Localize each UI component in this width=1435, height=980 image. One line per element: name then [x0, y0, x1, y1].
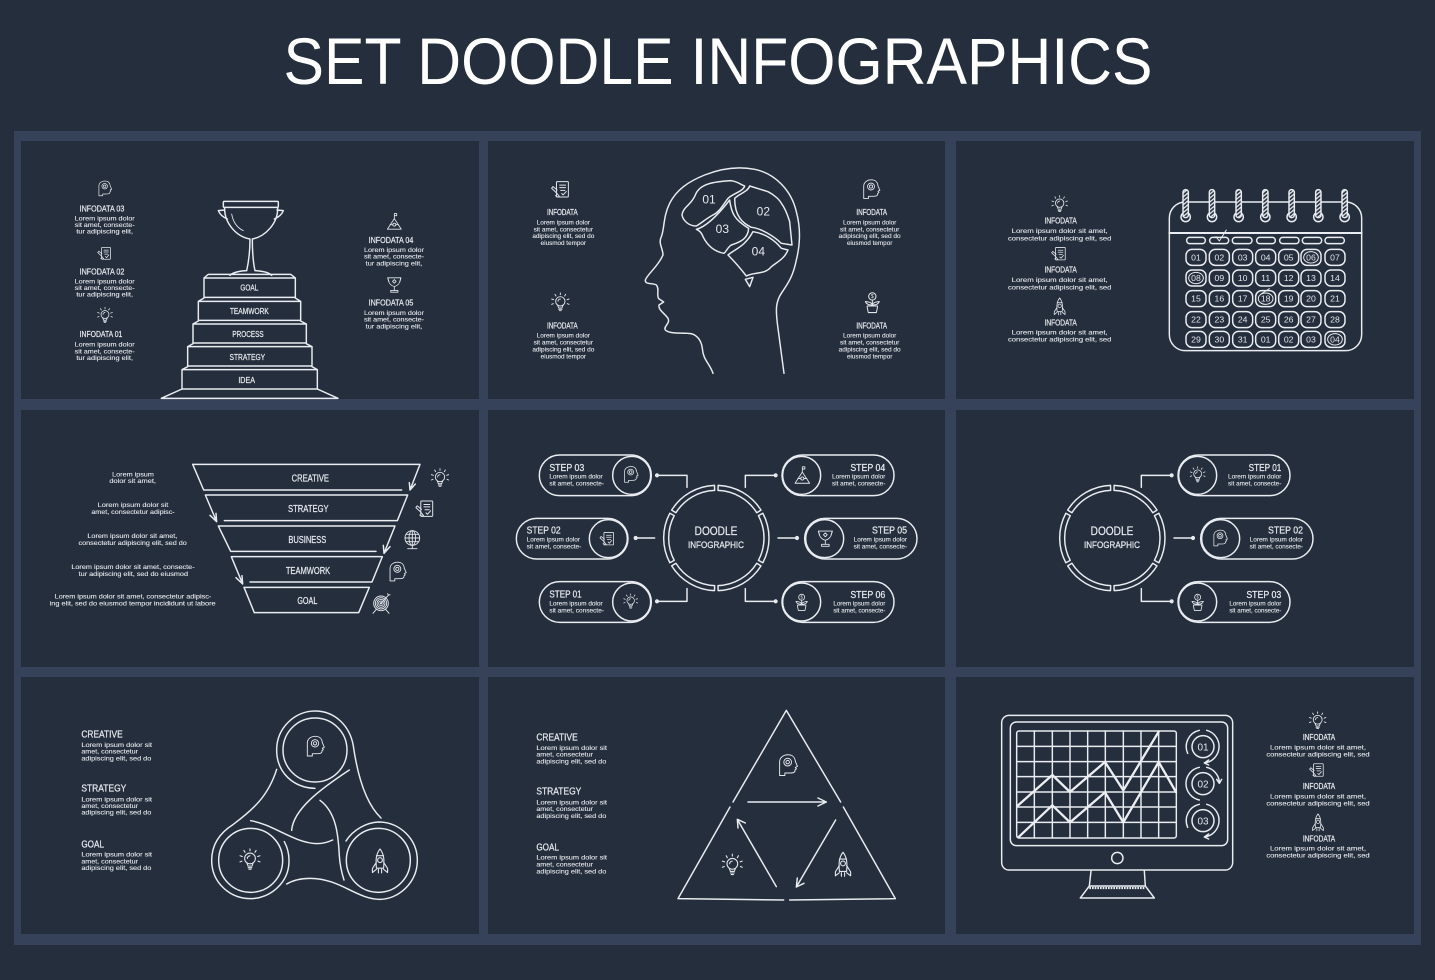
pill: step 04: Lorem ipsum dolor: [832, 474, 885, 481]
text block: infodata 05: [364, 299, 424, 330]
text block: strategy: STRATEGY: [536, 787, 582, 798]
text block: goal: adipiscing elit, sed do: [81, 865, 152, 872]
funnel left text: dolor sit amet,: [109, 478, 156, 485]
calendar date grid: 07: [1330, 252, 1340, 262]
pill: step 03: STEP 03: [549, 463, 584, 474]
text block: bottom left: [532, 321, 595, 360]
funnel labels: CREATIVE: [292, 473, 329, 484]
triangle outline: [678, 710, 895, 900]
text block: first: consectetur adipiscing elit, sed: [1008, 235, 1112, 242]
text block: top right: adipiscing elit, sed do: [839, 233, 901, 240]
panel: brain head: [488, 141, 945, 399]
funnel icon: target: [373, 594, 390, 613]
icon: trophy: [388, 278, 401, 292]
funnel icon: globe: [405, 531, 420, 549]
text block: infodata 01: Lorem ipsum dolor: [75, 341, 135, 348]
icon: document: [552, 182, 568, 197]
text block: goal: amet, consectetur: [81, 858, 138, 865]
panel: triple lobe: [21, 677, 479, 934]
text block: creative: CREATIVE: [81, 729, 123, 740]
pill: step 02: STEP 02: [527, 526, 561, 537]
text block: top left: sit amet, consectetur: [534, 226, 593, 233]
text block: bottom right: [839, 321, 901, 360]
icon: document: [1052, 247, 1065, 260]
text block: bottom left: INFODATA: [547, 321, 578, 330]
calendar date grid: 24: [1238, 315, 1248, 325]
text block: second: consectetur adipiscing elit, sed: [1266, 801, 1370, 808]
text block: strategy: adipiscing elit, sed do: [81, 810, 152, 817]
icon: pyramid: [387, 214, 401, 229]
icon: rocket: [372, 849, 388, 873]
icon: document: [1310, 764, 1323, 776]
arrow: bottom left up: [737, 819, 776, 887]
text block: infodata 05: Lorem ipsum dolor: [364, 310, 424, 317]
icon: head: [99, 181, 112, 196]
text block: infodata 02: [75, 267, 135, 299]
step circle 03: 03: [1197, 816, 1209, 827]
calendar date grid: 16: [1215, 294, 1224, 304]
funnel left text: ing elit, sed do eiusmod tempor incididunt ut labore: [50, 600, 216, 607]
funnel labels: GOAL: [297, 596, 318, 607]
panel: calendar: [956, 141, 1414, 399]
text block: creative: Lorem ipsum dolor sit: [536, 745, 607, 752]
text block: strategy: adipiscing elit, sed do: [536, 813, 607, 820]
pill: step 02: sit amet, consecte-: [1250, 543, 1303, 550]
text block: infodata 04: INFODATA 04: [369, 236, 414, 245]
pill: step 06: sit amet, consecte-: [833, 608, 885, 615]
calendar date grid: 08: [1191, 273, 1201, 283]
calendar date grid: 12: [1284, 273, 1294, 283]
funnel icon: bulb: [431, 469, 449, 486]
funnel level: creative: [193, 464, 420, 490]
text block: infodata 01: [75, 330, 135, 362]
pill: step 03: STEP 03: [1246, 590, 1281, 601]
pill: step 04: sit amet, consecte-: [832, 481, 885, 488]
pill: step 01: [1178, 455, 1290, 496]
funnel level: goal: [244, 587, 369, 613]
text block: strategy: amet, consectetur: [81, 803, 138, 810]
pill: step 01: [539, 582, 651, 622]
center label: [688, 524, 744, 550]
calendar date grid: 28: [1330, 315, 1340, 325]
text block: third: [1266, 834, 1370, 860]
text block: first: INFODATA: [1044, 217, 1077, 226]
central ring: [664, 485, 769, 591]
pill: step 02: Lorem ipsum dolor: [1250, 536, 1303, 543]
text block: goal: amet, consectetur: [536, 861, 593, 868]
text block: infodata 05: INFODATA 05: [369, 299, 414, 308]
monitor frame: [1002, 715, 1233, 870]
pill: step 01: STEP 01: [549, 590, 582, 601]
panel: six step ring: [488, 410, 945, 667]
calendar date grid: 01: [1191, 252, 1201, 262]
icon: bulb: [1052, 196, 1067, 212]
pill: step 03: Lorem ipsum dolor: [1229, 601, 1281, 608]
text block: top right: INFODATA: [856, 208, 888, 217]
text block: strategy: Lorem ipsum dolor sit: [81, 796, 152, 803]
text block: creative: [536, 732, 607, 766]
icon: bulb: [552, 293, 569, 311]
lobe numbers: 01: [702, 193, 716, 207]
calendar date grid: 27: [1306, 315, 1316, 325]
calendar date grid: 21: [1330, 294, 1340, 304]
pill: step 05: Lorem ipsum dolor: [854, 536, 907, 543]
pill: step 03: sit amet, consecte-: [1229, 608, 1281, 615]
funnel left text: amet, consectetur adipisc-: [91, 509, 175, 516]
calendar date grid: 25: [1261, 315, 1271, 325]
calendar date grid: 09: [1215, 273, 1224, 283]
funnel left text: Lorem ipsum dolor sit: [98, 502, 169, 509]
icon: rocket: [1054, 298, 1065, 315]
funnel left text: Lorem ipsum dolor sit amet, consectetur adipisc-: [55, 593, 211, 600]
pill: step 02: sit amet, consecte-: [527, 543, 581, 550]
calendar body: [1169, 202, 1362, 351]
pill: step 03: Lorem ipsum dolor: [549, 474, 603, 481]
text block: goal: [536, 842, 607, 875]
brain lobes: [682, 181, 792, 287]
calendar date grid: 06: [1306, 252, 1316, 262]
pill: step 02: [1201, 518, 1313, 559]
step circle 01: [1186, 730, 1219, 765]
icon: rocket: [1313, 814, 1323, 831]
text block: second: [1008, 266, 1112, 291]
text block: top right: eiusmod tempor: [847, 240, 892, 247]
calendar date grid: 02: [1215, 252, 1224, 262]
text block: first: INFODATA: [1303, 733, 1336, 742]
text block: top left: Lorem ipsum dolor: [537, 219, 590, 226]
step labels: STRATEGY: [229, 353, 266, 362]
text block: goal: GOAL: [536, 842, 560, 853]
panel: funnel: [21, 410, 479, 667]
text block: bottom right: eiusmod tempor: [847, 353, 892, 360]
text block: third: [1008, 318, 1112, 344]
text block: second: INFODATA: [1303, 782, 1336, 791]
step circle 03: [1186, 804, 1219, 839]
calendar date grid: 03: [1238, 252, 1248, 262]
text block: second: consectetur adipiscing elit, sed: [1008, 284, 1112, 291]
icon: rocket: [835, 852, 851, 876]
central ring: [1060, 485, 1165, 591]
text block: bottom right: sit amet, consectetur: [840, 340, 899, 347]
funnel left text: Lorem ipsum: [112, 471, 154, 478]
funnel level: teamwork: [231, 557, 382, 584]
text block: goal: Lorem ipsum dolor sit: [81, 852, 152, 859]
text block: top left: INFODATA: [547, 208, 578, 217]
text block: strategy: STRATEGY: [81, 784, 127, 795]
text block: infodata 04: [364, 236, 424, 267]
step labels: PROCESS: [232, 330, 264, 339]
calendar date grid: 14: [1330, 273, 1340, 283]
text block: second: [1266, 782, 1370, 808]
monitor stand: [1080, 871, 1154, 898]
text block: top left: eiusmod tempor: [541, 240, 586, 247]
panel: monitor chart: [956, 677, 1414, 934]
text block: infodata 03: tur adipiscing elit,: [76, 229, 133, 236]
pill: step 05: sit amet, consecte-: [854, 543, 907, 550]
text block: first: Lorem ipsum dolor sit amet,: [1270, 744, 1366, 751]
text block: third: INFODATA: [1303, 834, 1336, 843]
funnel labels: BUSINESS: [288, 535, 326, 546]
funnel left text: Lorem ipsum dolor sit amet,: [87, 533, 178, 540]
text block: infodata 01: INFODATA 01: [80, 330, 123, 339]
pill: step 02: Lorem ipsum dolor: [527, 536, 580, 543]
text block: creative: adipiscing elit, sed do: [81, 756, 152, 763]
pill: step 02: STEP 02: [1268, 526, 1303, 537]
icon: bulb: [1309, 712, 1326, 729]
pill: step 01: STEP 01: [1249, 463, 1281, 474]
text block: strategy: [536, 787, 607, 820]
center label: [1084, 524, 1140, 550]
pill: step 03: [1178, 582, 1290, 622]
funnel left text: Lorem ipsum dolor sit amet, consecte-: [71, 564, 195, 571]
pill: step 03: [539, 455, 651, 496]
funnel labels: STRATEGY: [288, 504, 329, 515]
text block: goal: adipiscing elit, sed do: [536, 868, 607, 875]
text block: third: consectetur adipiscing elit, sed: [1266, 853, 1370, 860]
text block: infodata 05: tur adipiscing elit,: [366, 323, 423, 330]
calendar rings: [1181, 190, 1349, 222]
trophy: [218, 201, 283, 275]
grid: [1017, 731, 1176, 838]
connectors: [634, 474, 798, 603]
title: SET DOODLE INFOGRAPHICS: [284, 24, 1152, 98]
lobe numbers: 04: [752, 244, 765, 258]
text block: creative: Lorem ipsum dolor sit: [81, 742, 152, 749]
text block: strategy: amet, consectetur: [536, 806, 593, 813]
step labels: [229, 283, 269, 385]
text block: second: Lorem ipsum dolor sit amet,: [1012, 277, 1108, 284]
icon: head: [864, 180, 880, 199]
text block: first: [1008, 217, 1112, 242]
text block: first: [1266, 733, 1370, 759]
calendar date grid: 19: [1284, 294, 1294, 304]
text block: goal: Lorem ipsum dolor sit: [536, 855, 607, 862]
panel: triangle: [488, 677, 945, 934]
funnel icon: document: [416, 501, 433, 516]
funnel left text: tur adipiscing elit, sed do eiusmod: [79, 571, 189, 578]
calendar date grid: 29: [1191, 334, 1201, 344]
text block: creative: CREATIVE: [536, 732, 578, 743]
calendar date grid: 11: [1261, 273, 1270, 283]
lobe numbers: [702, 193, 770, 258]
step circle 01: 01: [1197, 742, 1209, 753]
text block: infodata 02: Lorem ipsum dolor: [75, 278, 135, 285]
pill: step 06: [782, 582, 894, 622]
text block: infodata 01: sit amet, consecte-: [75, 348, 135, 355]
pill: step 04: STEP 04: [850, 463, 886, 474]
icon: document: [98, 247, 111, 259]
weekday pills: [1187, 230, 1344, 244]
icon: head: [780, 755, 797, 775]
panel: trophy steps: [21, 141, 479, 399]
lobe numbers: 03: [716, 222, 729, 236]
text block: bottom right: adipiscing elit, sed do: [839, 346, 901, 353]
calendar date grid: 18: [1261, 294, 1271, 304]
arrow: right down: [796, 820, 836, 887]
text block: goal: [81, 839, 152, 872]
text block: bottom left: eiusmod tempor: [541, 353, 586, 360]
center label: INFOGRAPHIC: [1084, 540, 1140, 550]
text block: infodata 01: tur adipiscing elit,: [76, 355, 133, 362]
text block: second: INFODATA: [1044, 266, 1077, 275]
text block: infodata 04: tur adipiscing elit,: [366, 260, 423, 267]
calendar date grid: 23: [1215, 315, 1224, 325]
funnel level: business: [218, 526, 395, 553]
text block: creative: amet, consectetur: [536, 752, 593, 759]
head outline: [645, 168, 799, 373]
text block: infodata 02: INFODATA 02: [80, 267, 125, 276]
step circle 02: 02: [1197, 779, 1209, 790]
funnel level: strategy: [205, 495, 408, 522]
text block: bottom left: sit amet, consectetur: [534, 340, 593, 347]
icon: bulb: [240, 849, 260, 869]
text block: infodata 03: Lorem ipsum dolor: [75, 215, 135, 222]
text block: infodata 02: sit amet, consecte-: [75, 285, 135, 292]
center label: DOODLE: [1091, 524, 1133, 538]
text block: goal: GOAL: [81, 839, 105, 850]
calendar date grid: 02: [1284, 334, 1294, 344]
text block: second: Lorem ipsum dolor sit amet,: [1270, 793, 1366, 800]
text block: bottom right: Lorem ipsum dolor: [843, 333, 896, 340]
text block: first: consectetur adipiscing elit, sed: [1266, 752, 1370, 759]
text block: third: INFODATA: [1044, 318, 1077, 327]
pill: step 03: sit amet, consecte-: [549, 481, 604, 488]
calendar date grid: 22: [1191, 315, 1201, 325]
text block: strategy: [81, 784, 152, 817]
pill: step 01: sit amet, consecte-: [1228, 481, 1281, 488]
text block: top right: Lorem ipsum dolor: [843, 219, 896, 226]
pill: step 05: STEP 05: [872, 526, 907, 537]
text block: bottom left: adipiscing elit, sed do: [532, 346, 595, 353]
icon: bulb: [98, 307, 112, 322]
icon: plant: [865, 293, 879, 313]
text block: infodata 02: tur adipiscing elit,: [76, 292, 133, 299]
lobe numbers: 02: [757, 204, 770, 218]
text block: creative: amet, consectetur: [81, 749, 138, 756]
text block: infodata 04: sit amet, consecte-: [364, 254, 424, 261]
text block: infodata 03: INFODATA 03: [80, 205, 125, 214]
funnel labels: [286, 473, 331, 607]
text block: infodata 03: [75, 205, 135, 236]
text block: third: Lorem ipsum dolor sit amet,: [1012, 329, 1108, 336]
pill: step 06: Lorem ipsum dolor: [833, 601, 885, 608]
calendar date grid: 20: [1306, 294, 1316, 304]
step circle 02: [1186, 767, 1222, 800]
center label: INFOGRAPHIC: [688, 540, 744, 550]
text block: infodata 04: Lorem ipsum dolor: [364, 247, 424, 254]
pill: step 01: Lorem ipsum dolor: [1228, 474, 1281, 481]
step labels: IDEA: [238, 376, 256, 385]
pill: step 02: [516, 518, 628, 559]
calendar date grid: 31: [1238, 334, 1248, 344]
text block: top right: [839, 208, 901, 247]
pill: step 04: [782, 455, 894, 496]
text block: strategy: Lorem ipsum dolor sit: [536, 799, 607, 806]
pill: step 05: [805, 518, 917, 559]
text block: first: Lorem ipsum dolor sit amet,: [1012, 228, 1108, 235]
icon: bulb: [722, 854, 742, 875]
text block: third: Lorem ipsum dolor sit amet,: [1270, 845, 1366, 852]
text block: top left: [532, 208, 595, 247]
center label: DOODLE: [695, 524, 737, 538]
connectors: [1141, 474, 1194, 603]
text block: third: consectetur adipiscing elit, sed: [1008, 337, 1112, 344]
calendar date grid: 04: [1330, 334, 1340, 344]
lobed diagram: [212, 711, 417, 899]
calendar date grid: [1186, 249, 1345, 347]
funnel icon: head: [390, 562, 406, 581]
text block: top left: adipiscing elit, sed do: [532, 233, 595, 240]
calendar date grid: 13: [1306, 273, 1316, 283]
text block: top right: sit amet, consectetur: [840, 226, 899, 233]
calendar date grid: 15: [1191, 294, 1201, 304]
text block: infodata 05: sit amet, consecte-: [364, 317, 424, 324]
step labels: GOAL: [240, 283, 259, 292]
funnel labels: TEAMWORK: [286, 566, 331, 577]
text block: bottom right: INFODATA: [856, 321, 888, 330]
pill: step 06: STEP 06: [850, 590, 885, 601]
calendar date grid: 03: [1306, 334, 1316, 344]
arrow: top right: [748, 798, 826, 806]
text block: bottom left: Lorem ipsum dolor: [537, 333, 590, 340]
pill: step 01: Lorem ipsum dolor: [549, 601, 603, 608]
text block: creative: [81, 729, 152, 763]
pill: step 01: sit amet, consecte-: [549, 608, 604, 615]
text block: creative: adipiscing elit, sed do: [536, 759, 607, 766]
calendar date grid: 05: [1284, 252, 1294, 262]
icon: head: [307, 736, 324, 756]
stairs: [161, 274, 338, 398]
step labels: TEAMWORK: [230, 307, 269, 316]
calendar date grid: 26: [1284, 315, 1294, 325]
panel: three step ring: [956, 410, 1414, 667]
calendar date grid: 01: [1261, 334, 1271, 344]
line chart: [1017, 732, 1176, 837]
calendar date grid: 30: [1215, 334, 1224, 344]
calendar date grid: 04: [1261, 252, 1271, 262]
calendar date grid: 10: [1238, 273, 1248, 283]
funnel left text: [50, 471, 216, 607]
calendar date grid: 17: [1238, 294, 1248, 304]
funnel left text: consectetur adipiscing elit, sed do: [78, 540, 187, 547]
text block: infodata 03: sit amet, consecte-: [75, 222, 135, 229]
